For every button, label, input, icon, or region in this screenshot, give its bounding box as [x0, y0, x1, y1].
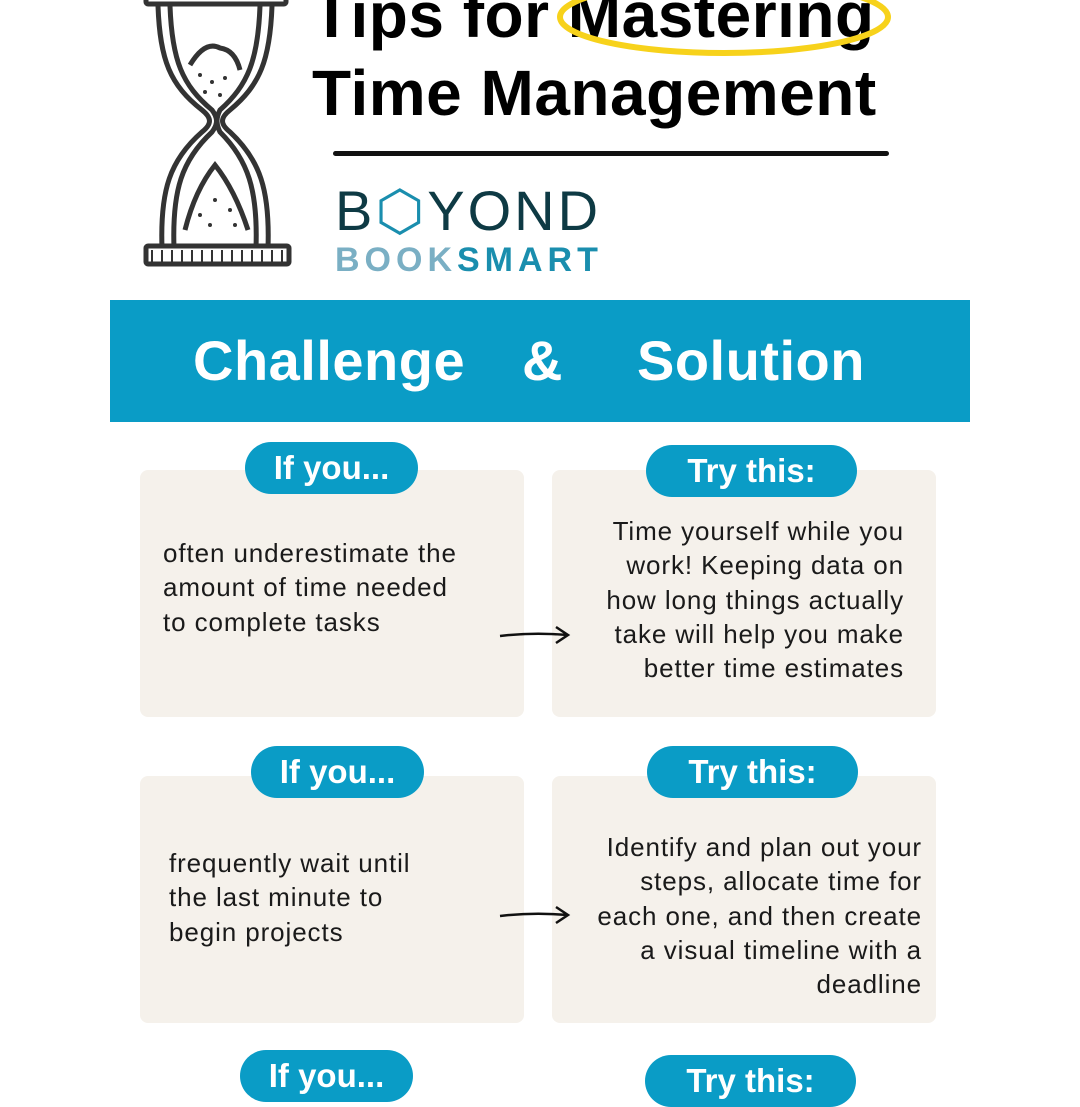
banner: Challenge & Solution: Solution — [637, 329, 865, 392]
text: solution 1 — [606, 516, 904, 683]
pill: If you 1: If you... — [274, 449, 389, 486]
banner: Challenge & Solution — [110, 300, 970, 422]
pill: Try this 1: Try this: — [687, 452, 816, 489]
arrow 1 — [500, 626, 570, 644]
banner: Challenge & Solution: & — [522, 329, 563, 392]
panel: row 1 solution — [552, 470, 936, 717]
text: solution 1: better time estimates — [644, 653, 904, 683]
underline stroke — [333, 151, 889, 156]
pill: If you 1 — [245, 442, 418, 494]
title — [312, 0, 891, 129]
title: Time Management — [312, 57, 877, 129]
pill: If you 2: If you... — [280, 753, 395, 790]
text: solution 2: a visual timeline with a — [640, 935, 922, 965]
text: solution 1: take will help you make — [614, 619, 904, 649]
text: solution 2: steps, allocate time for — [640, 866, 922, 896]
text: challenge 2: the last minute to — [169, 882, 383, 912]
pill: Try this 3 — [645, 1055, 856, 1107]
pill: Try this 1 — [646, 445, 857, 497]
pill: If you 3 — [240, 1050, 413, 1102]
text: solution 1: how long things actually — [606, 585, 904, 615]
text: challenge 2 — [169, 848, 410, 947]
arrow 2 — [500, 906, 570, 924]
panel: row 2 solution — [552, 776, 936, 1023]
pill: Try this 2 — [647, 746, 858, 798]
panel: row 1 challenge — [140, 470, 524, 717]
pill: Try this 2: Try this: — [688, 753, 817, 790]
logo: Beyond BookSmart: BOOKSMART — [335, 241, 603, 279]
text: challenge 1: to complete tasks — [163, 607, 381, 637]
text: solution 1: work! Keeping data on — [626, 550, 904, 580]
text: challenge 1: amount of time needed — [163, 572, 448, 602]
panel: row 2 challenge — [140, 776, 524, 1023]
text: challenge 1: often underestimate the — [163, 538, 457, 568]
logo: Beyond BookSmart — [335, 179, 603, 279]
text: solution 2: each one, and then create — [597, 901, 922, 931]
pill: If you 2 — [251, 746, 424, 798]
pill: If you 3: If you... — [269, 1057, 384, 1094]
pill: Try this 3: Try this: — [686, 1062, 815, 1099]
text: challenge 2: begin projects — [169, 917, 343, 947]
text: solution 2: deadline — [816, 969, 922, 999]
text: challenge 1 — [163, 538, 457, 637]
text: challenge 2: frequently wait until — [169, 848, 410, 878]
text: solution 2 — [597, 832, 922, 999]
banner: Challenge & Solution: Challenge — [193, 329, 465, 392]
text: solution 2: Identify and plan out your — [607, 832, 922, 862]
logo: Beyond BookSmart: B⬡YOND — [335, 179, 601, 242]
icon: hourglass — [144, 0, 292, 266]
text: solution 1: Time yourself while you — [613, 516, 904, 546]
